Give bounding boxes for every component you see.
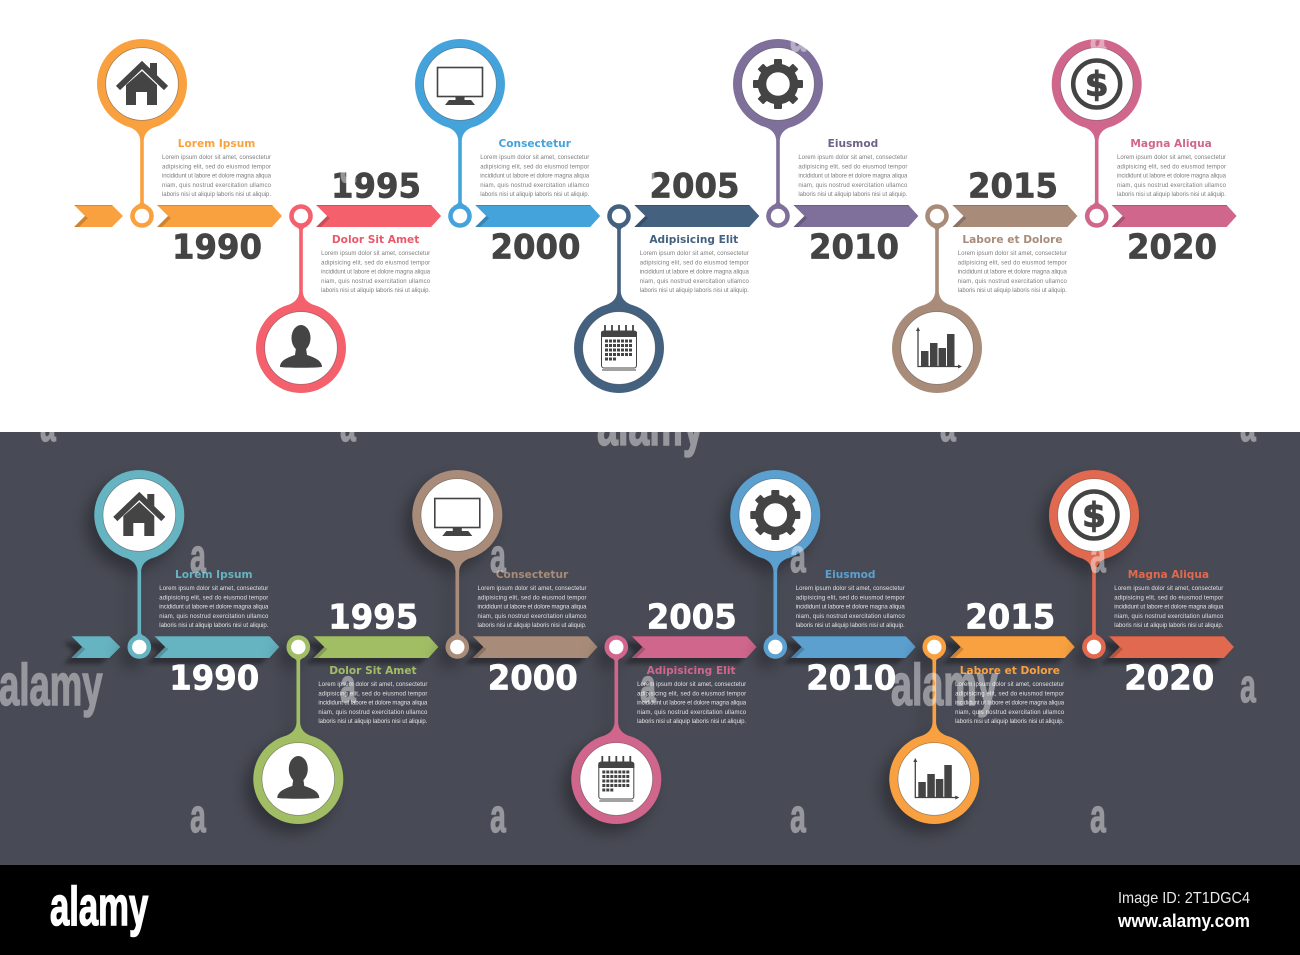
watermarks: a (640, 661, 656, 713)
text block: incididunt ut labore et dolore magna aliqua (955, 700, 1065, 706)
footer logo: alamy (50, 875, 149, 937)
text block (1114, 586, 1224, 629)
pin (94, 470, 184, 659)
image id: Image ID: 2T1DGC4 (1118, 890, 1250, 907)
text block: incididunt ut labore et dolore magna aliqua (159, 604, 269, 610)
text block: laboris nisi ut aliquip laboris nisi ut aliquip. (318, 719, 428, 725)
panel: light timeline (0, 0, 1300, 432)
faint watermarks on light panel (340, 10, 1106, 193)
text block: laboris nisi ut aliquip laboris nisi ut aliquip. (798, 192, 908, 198)
watermarks: a (490, 791, 506, 843)
icon: bar chart (913, 758, 959, 800)
text block (480, 155, 590, 198)
text block: niam, quis nostrud exercitation ullamco (798, 183, 908, 189)
year: 2010 (809, 228, 899, 268)
text block: laboris nisi ut aliquip laboris nisi ut aliquip. (958, 288, 1067, 294)
text block (321, 251, 431, 294)
icon: dollar coin: $ (1085, 65, 1109, 105)
text block: incididunt ut labore et dolore magna aliqua (637, 700, 747, 706)
text block: incididunt ut labore et dolore magna aliqua (321, 270, 431, 276)
panel background: white (0, 0, 1300, 432)
arrow (634, 205, 759, 227)
text block: adipisicing elit, sed do eiusmod tempor (321, 260, 430, 266)
text block: Lorem ipsum dolor sit amet, consectetur (798, 155, 907, 161)
watermarks: a (1240, 400, 1256, 452)
year: 2010 (806, 658, 896, 698)
text block: Lorem ipsum dolor sit amet, consectetur (162, 155, 271, 161)
milestone 2005 (574, 166, 759, 393)
arrow (316, 205, 441, 227)
year: 2015 (965, 598, 1055, 638)
text block (1117, 155, 1227, 198)
milestone 2000 (415, 39, 600, 268)
year: 2020 (1124, 658, 1214, 698)
arrow (313, 636, 438, 658)
milestone 1990 (94, 470, 279, 698)
text block: laboris nisi ut aliquip laboris nisi ut aliquip. (640, 288, 749, 294)
pin (97, 39, 187, 228)
text block: laboris nisi ut aliquip laboris nisi ut aliquip. (796, 623, 905, 629)
text block: incididunt ut labore et dolore magna aliqua (162, 174, 272, 180)
text block: Lorem ipsum dolor sit amet, consectetur (637, 682, 746, 688)
arrow (632, 636, 757, 658)
icon: gear (750, 490, 800, 540)
watermarks: a (1240, 661, 1256, 713)
text block (958, 251, 1067, 294)
text block: Lorem ipsum dolor sit amet, consectetur (480, 155, 589, 161)
text block: Lorem ipsum dolor sit amet, consectetur (318, 682, 427, 688)
panel: dark timeline (71, 470, 1234, 824)
watermarks: a (340, 400, 356, 452)
pin (1049, 470, 1139, 659)
text block (478, 586, 587, 629)
arrow (1109, 636, 1234, 658)
faint watermarks on light panel: a (790, 10, 806, 62)
text block: niam, quis nostrud exercitation ullamco (955, 710, 1065, 716)
arrow (950, 636, 1075, 658)
milestone 2015 (889, 598, 1075, 824)
text block: adipisicing elit, sed do eiusmod tempor (1117, 164, 1226, 170)
text block: laboris nisi ut aliquip laboris nisi ut aliquip. (159, 623, 269, 629)
text block: Lorem ipsum dolor sit amet, consectetur (958, 251, 1067, 257)
icon: house (118, 63, 166, 105)
arrow (475, 205, 600, 227)
watermarks: alamy (597, 394, 704, 458)
heading: Magna Aliqua (1128, 569, 1209, 581)
heading: Consectetur (498, 138, 572, 150)
icon: bar chart (916, 327, 962, 368)
milestone 1995 (256, 166, 441, 393)
heading: Adipisicing Elit (647, 665, 736, 677)
heading: Eiusmod (825, 569, 876, 581)
heading: Adipisicing Elit (649, 234, 738, 246)
pin (256, 204, 346, 393)
pin (733, 39, 823, 228)
watermarks (0, 432, 1256, 834)
text block: adipisicing elit, sed do eiusmod tempor (478, 595, 587, 601)
text block: niam, quis nostrud exercitation ullamco (1117, 183, 1227, 189)
text block: laboris nisi ut aliquip laboris nisi ut aliquip. (637, 719, 746, 725)
pin (892, 204, 982, 393)
year: 1995 (328, 598, 418, 638)
faint watermarks on light panel: a (1090, 10, 1106, 62)
text block: laboris nisi ut aliquip laboris nisi ut aliquip. (1114, 623, 1224, 629)
arrow (154, 636, 279, 658)
text block: adipisicing elit, sed do eiusmod tempor (796, 595, 905, 601)
watermarks: a (790, 791, 806, 843)
text block: niam, quis nostrud exercitation ullamco (640, 279, 749, 285)
pin (730, 470, 820, 659)
icon: calendar (598, 756, 634, 801)
text block: niam, quis nostrud exercitation ullamco (162, 183, 272, 189)
pin (574, 204, 664, 393)
milestone 2010 (733, 39, 918, 268)
text block: niam, quis nostrud exercitation ullamco (478, 614, 587, 620)
text block: laboris nisi ut aliquip laboris nisi ut aliquip. (162, 192, 271, 198)
icon: dollar coin: $ (1082, 496, 1106, 536)
milestone 2000 (412, 470, 598, 698)
text block: Lorem ipsum dolor sit amet, consectetur (1114, 586, 1223, 592)
text block: adipisicing elit, sed do eiusmod tempor (640, 260, 749, 266)
arrow (793, 205, 918, 227)
icon: monitor (435, 498, 480, 536)
text block: niam, quis nostrud exercitation ullamco (637, 710, 747, 716)
icon: monitor (438, 68, 482, 105)
heading: Dolor Sit Amet (332, 234, 419, 246)
icon: house (115, 494, 163, 536)
text block: adipisicing elit, sed do eiusmod tempor (958, 260, 1067, 266)
text block (798, 155, 908, 198)
icon: calendar (601, 325, 637, 370)
text block (955, 682, 1065, 725)
arrow (472, 636, 598, 658)
icon: gear (753, 59, 803, 109)
text block: adipisicing elit, sed do eiusmod tempor (159, 595, 268, 601)
text block: niam, quis nostrud exercitation ullamco (159, 614, 269, 620)
milestone 2020 (1049, 470, 1234, 698)
watermarks: a (790, 531, 806, 583)
icon: dollar coin (1070, 492, 1118, 538)
text block: laboris nisi ut aliquip laboris nisi ut aliquip. (955, 719, 1064, 725)
milestone 2005 (571, 598, 757, 824)
text block (318, 682, 428, 725)
website: www.alamy.com (1117, 911, 1250, 931)
watermarks: a (1090, 531, 1106, 583)
watermarks: a (490, 531, 506, 583)
pin (571, 635, 661, 824)
year: 2000 (488, 658, 578, 698)
panel background: dark (0, 432, 1300, 865)
text block: incididunt ut labore et dolore magna aliqua (318, 700, 428, 706)
text block: adipisicing elit, sed do eiusmod tempor (798, 164, 907, 170)
text block: laboris nisi ut aliquip laboris nisi ut aliquip. (478, 623, 587, 629)
milestone 1990 (97, 39, 282, 268)
faint watermarks on light panel: a (640, 141, 656, 193)
text block (637, 682, 747, 725)
text block: Lorem ipsum dolor sit amet, consectetur (321, 251, 430, 257)
pin (415, 39, 505, 228)
watermarks: alamy (891, 654, 998, 718)
text block: incididunt ut labore et dolore magna aliqua (478, 604, 587, 610)
text block: incididunt ut labore et dolore magna aliqua (958, 270, 1067, 276)
year: 2005 (650, 166, 740, 206)
watermarks: a (190, 531, 206, 583)
milestone 2015 (892, 166, 1078, 393)
text block: incididunt ut labore et dolore magna aliqua (1117, 174, 1227, 180)
text block: Lorem ipsum dolor sit amet, consectetur (640, 251, 749, 257)
year: 1990 (169, 658, 259, 698)
heading: Dolor Sit Amet (329, 665, 417, 677)
pin (1052, 39, 1142, 228)
milestone 2010 (730, 470, 916, 698)
watermarks: a (940, 400, 956, 452)
heading: Lorem Ipsum (178, 138, 255, 150)
start arrow (71, 636, 120, 658)
text block (162, 155, 272, 198)
watermarks: a (340, 661, 356, 713)
text block: Lorem ipsum dolor sit amet, consectetur (796, 586, 905, 592)
text block: adipisicing elit, sed do eiusmod tempor (480, 164, 589, 170)
text block: Lorem ipsum dolor sit amet, consectetur (1117, 155, 1226, 161)
year: 2005 (647, 598, 737, 638)
heading: Consectetur (496, 569, 569, 581)
heading: Magna Aliqua (1130, 138, 1212, 150)
year: 2015 (968, 166, 1058, 206)
heading: Labore et Dolore (962, 234, 1063, 246)
watermarks: a (190, 791, 206, 843)
text block: niam, quis nostrud exercitation ullamco (796, 614, 905, 620)
year: 1995 (331, 166, 421, 206)
text block: adipisicing elit, sed do eiusmod tempor (955, 691, 1064, 697)
text block (640, 251, 749, 294)
text block (159, 586, 269, 629)
pin (889, 635, 979, 824)
text block (796, 586, 905, 629)
text block: adipisicing elit, sed do eiusmod tempor (162, 164, 271, 170)
arrow (1112, 205, 1237, 227)
arrow (952, 205, 1078, 227)
text block: laboris nisi ut aliquip laboris nisi ut aliquip. (1117, 192, 1226, 198)
icon: person (277, 756, 319, 799)
start arrow (74, 205, 123, 227)
text block: niam, quis nostrud exercitation ullamco (321, 279, 431, 285)
text block: laboris nisi ut aliquip laboris nisi ut aliquip. (321, 288, 430, 294)
milestone 2020 (1052, 39, 1237, 268)
text block: incididunt ut labore et dolore magna aliqua (480, 174, 590, 180)
text block: laboris nisi ut aliquip laboris nisi ut aliquip. (480, 192, 590, 198)
year: 2020 (1127, 228, 1217, 268)
pin (253, 635, 343, 824)
text block: Lorem ipsum dolor sit amet, consectetur (159, 586, 268, 592)
text block: adipisicing elit, sed do eiusmod tempor (1114, 595, 1223, 601)
heading: Lorem Ipsum (175, 569, 253, 581)
text block: niam, quis nostrud exercitation ullamco (480, 183, 590, 189)
watermarks: a (1090, 791, 1106, 843)
text block: incididunt ut labore et dolore magna aliqua (796, 604, 905, 610)
pin (412, 470, 502, 659)
text block: niam, quis nostrud exercitation ullamco (958, 279, 1067, 285)
arrow (791, 636, 916, 658)
icon: dollar coin (1073, 60, 1120, 108)
text block: adipisicing elit, sed do eiusmod tempor (318, 691, 427, 697)
heading: Eiusmod (828, 138, 878, 150)
milestone 1995 (253, 598, 438, 824)
watermarks: a (40, 400, 56, 452)
footer bar (0, 865, 1300, 955)
text block: Lorem ipsum dolor sit amet, consectetur (478, 586, 587, 592)
watermarks: alamy (0, 654, 103, 718)
text block: incididunt ut labore et dolore magna aliqua (640, 270, 749, 276)
text block: Lorem ipsum dolor sit amet, consectetur (955, 682, 1064, 688)
icon: person (280, 325, 322, 368)
heading: Labore et Dolore (960, 665, 1060, 677)
arrow (157, 205, 282, 227)
year: 1990 (172, 228, 262, 268)
year: 2000 (490, 228, 580, 268)
text block: niam, quis nostrud exercitation ullamco (1114, 614, 1224, 620)
faint watermarks on light panel: a (340, 141, 356, 193)
text block: niam, quis nostrud exercitation ullamco (318, 710, 428, 716)
text block: adipisicing elit, sed do eiusmod tempor (637, 691, 746, 697)
text block: incididunt ut labore et dolore magna aliqua (798, 174, 908, 180)
text block: incididunt ut labore et dolore magna aliqua (1114, 604, 1224, 610)
